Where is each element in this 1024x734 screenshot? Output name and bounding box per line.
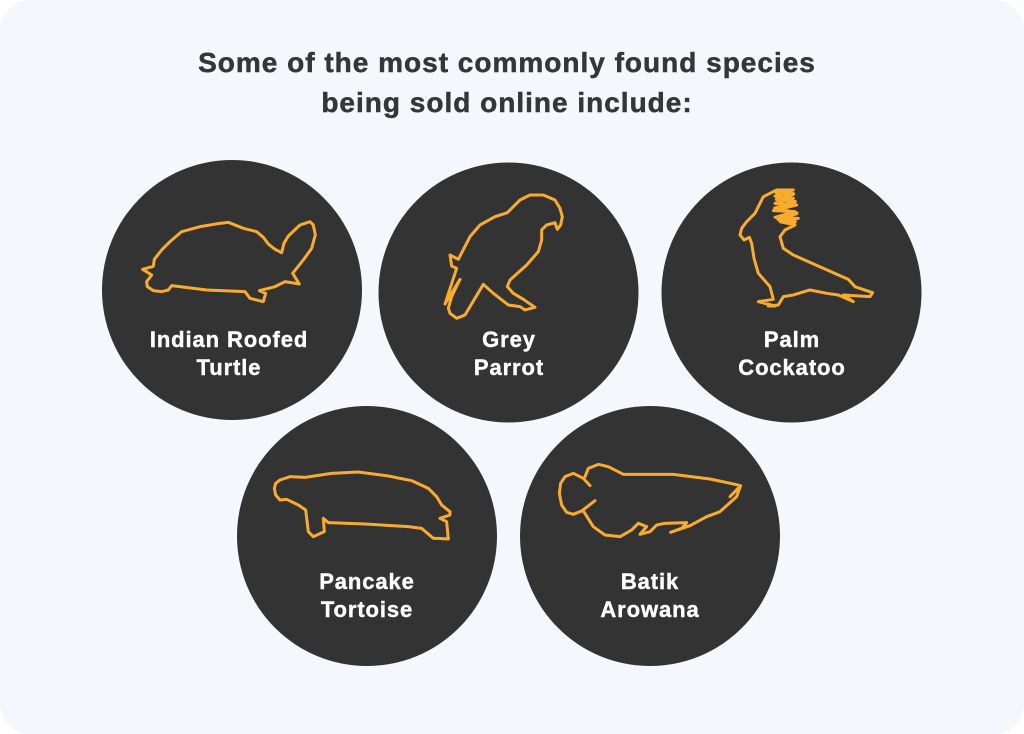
label: Pancake Tortoise xyxy=(319,569,415,622)
label: Indian Roofed Turtle xyxy=(150,327,308,380)
label: Batik Arowana: Arowana xyxy=(600,597,700,622)
label: Palm Cockatoo xyxy=(738,327,846,380)
icon: parrot outline xyxy=(445,195,562,318)
title: being sold online include: xyxy=(321,87,693,118)
circle: Grey Parrot xyxy=(378,162,638,422)
circle: Batik Arowana xyxy=(520,406,780,666)
icon: turtle outline xyxy=(143,222,315,302)
icon: cockatoo outline xyxy=(740,190,873,306)
label: Palm Cockatoo: Cockatoo xyxy=(738,355,846,380)
label: Palm Cockatoo: Palm xyxy=(764,327,820,352)
label: Indian Roofed Turtle: Turtle xyxy=(197,355,261,380)
icon: pancake tortoise outline xyxy=(274,472,450,539)
label: Batik Arowana: Batik xyxy=(621,569,679,594)
circle: Indian Roofed Turtle xyxy=(102,160,362,420)
title: Some of the most commonly found species xyxy=(198,47,816,78)
icon: arowana outline xyxy=(559,464,741,537)
circle: Palm Cockatoo xyxy=(662,162,922,422)
label: Indian Roofed Turtle: Indian Roofed xyxy=(150,327,308,352)
label: Pancake Tortoise: Tortoise xyxy=(321,597,413,622)
label: Pancake Tortoise: Pancake xyxy=(319,569,415,594)
label: Grey Parrot: Grey xyxy=(482,327,536,352)
circle: Pancake Tortoise xyxy=(237,406,497,666)
title xyxy=(198,47,816,118)
label: Grey Parrot xyxy=(474,327,544,380)
label: Grey Parrot: Parrot xyxy=(474,355,544,380)
label: Batik Arowana xyxy=(600,569,700,622)
